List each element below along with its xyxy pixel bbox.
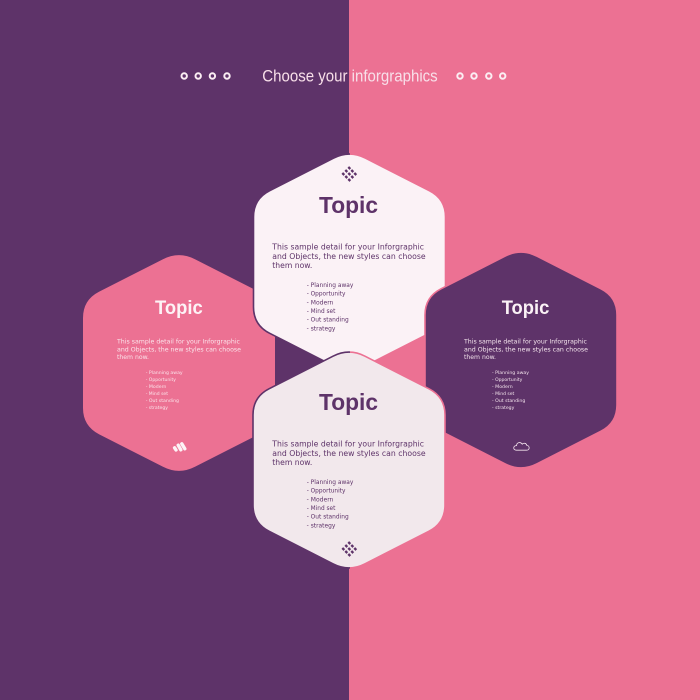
bottom list: - Opportunity [307, 489, 346, 495]
top heading: Topic [319, 192, 378, 218]
right heading: Topic [502, 298, 550, 319]
bottom description: This sample detail for your Inforgraphic [271, 440, 424, 448]
right description: and Objects, the new styles can choose [464, 346, 588, 353]
panel: top hexagon [254, 154, 446, 370]
bottom heading: Topic [319, 389, 378, 415]
bottom list: - Planning away [307, 480, 354, 486]
bottom hexagon shape [253, 352, 445, 568]
right list: - Out standing [492, 398, 525, 404]
top list: - Planning away [307, 283, 354, 289]
right list [492, 370, 529, 411]
panel: bottom hexagon [253, 352, 445, 568]
top list: - Modern [307, 300, 334, 306]
right description [463, 339, 588, 361]
right list: - Modern [492, 384, 513, 390]
top hexagon shape [254, 154, 446, 370]
left list: - Mind set [146, 391, 168, 397]
right list: - Opportunity [492, 377, 523, 383]
left description: them now. [117, 354, 149, 361]
right description: them now. [464, 354, 496, 361]
icon: white slanted bars [175, 444, 185, 450]
title: Choose your inforgraphics [262, 68, 438, 86]
icon: purple diamond knot [342, 542, 356, 556]
background: right pink half [349, 0, 700, 700]
left list [146, 370, 183, 411]
bottom description [271, 440, 426, 467]
left hexagon shape [83, 255, 275, 471]
right description: This sample detail for your Inforgraphic [463, 339, 587, 346]
left list: - Modern [146, 384, 166, 390]
left list: - strategy [146, 405, 168, 411]
top list [307, 283, 354, 332]
left description [116, 339, 241, 361]
top list: - Mind set [307, 309, 336, 315]
background: left purple half [0, 0, 349, 700]
left description: This sample detail for your Inforgraphic [116, 339, 240, 346]
top description: and Objects, the new styles can choose [272, 252, 426, 261]
panel: left hexagon [83, 255, 275, 471]
top description: This sample detail for your Inforgraphic [271, 242, 424, 252]
icon: cloud outline [514, 443, 529, 450]
top list: - Out standing [307, 318, 349, 324]
right dot row [457, 73, 505, 79]
left list: - Opportunity [146, 377, 176, 383]
bottom list [307, 480, 354, 529]
left description: and Objects, the new styles can choose [117, 346, 241, 353]
icon: purple diamond knot [342, 167, 356, 181]
bottom description: and Objects, the new styles can choose [272, 449, 426, 458]
bottom list: - Modern [307, 497, 334, 503]
header: title with dots [182, 68, 505, 86]
right hexagon shape [425, 252, 617, 468]
bottom description: them now. [272, 458, 312, 467]
left dot row [182, 73, 230, 79]
panel: right hexagon [425, 252, 617, 468]
top list: - strategy [307, 326, 336, 332]
bottom list: - strategy [307, 523, 336, 529]
top description [271, 242, 426, 270]
bottom list: - Out standing [307, 515, 349, 521]
left heading: Topic [155, 298, 203, 319]
top list: - Opportunity [307, 292, 346, 298]
right list: - Mind set [492, 391, 514, 397]
bottom list: - Mind set [307, 506, 336, 512]
left list: - Out standing [146, 398, 179, 404]
right list: - Planning away [492, 370, 529, 376]
right list: - strategy [492, 405, 515, 411]
left list: - Planning away [146, 370, 183, 376]
top description: them now. [272, 261, 312, 270]
